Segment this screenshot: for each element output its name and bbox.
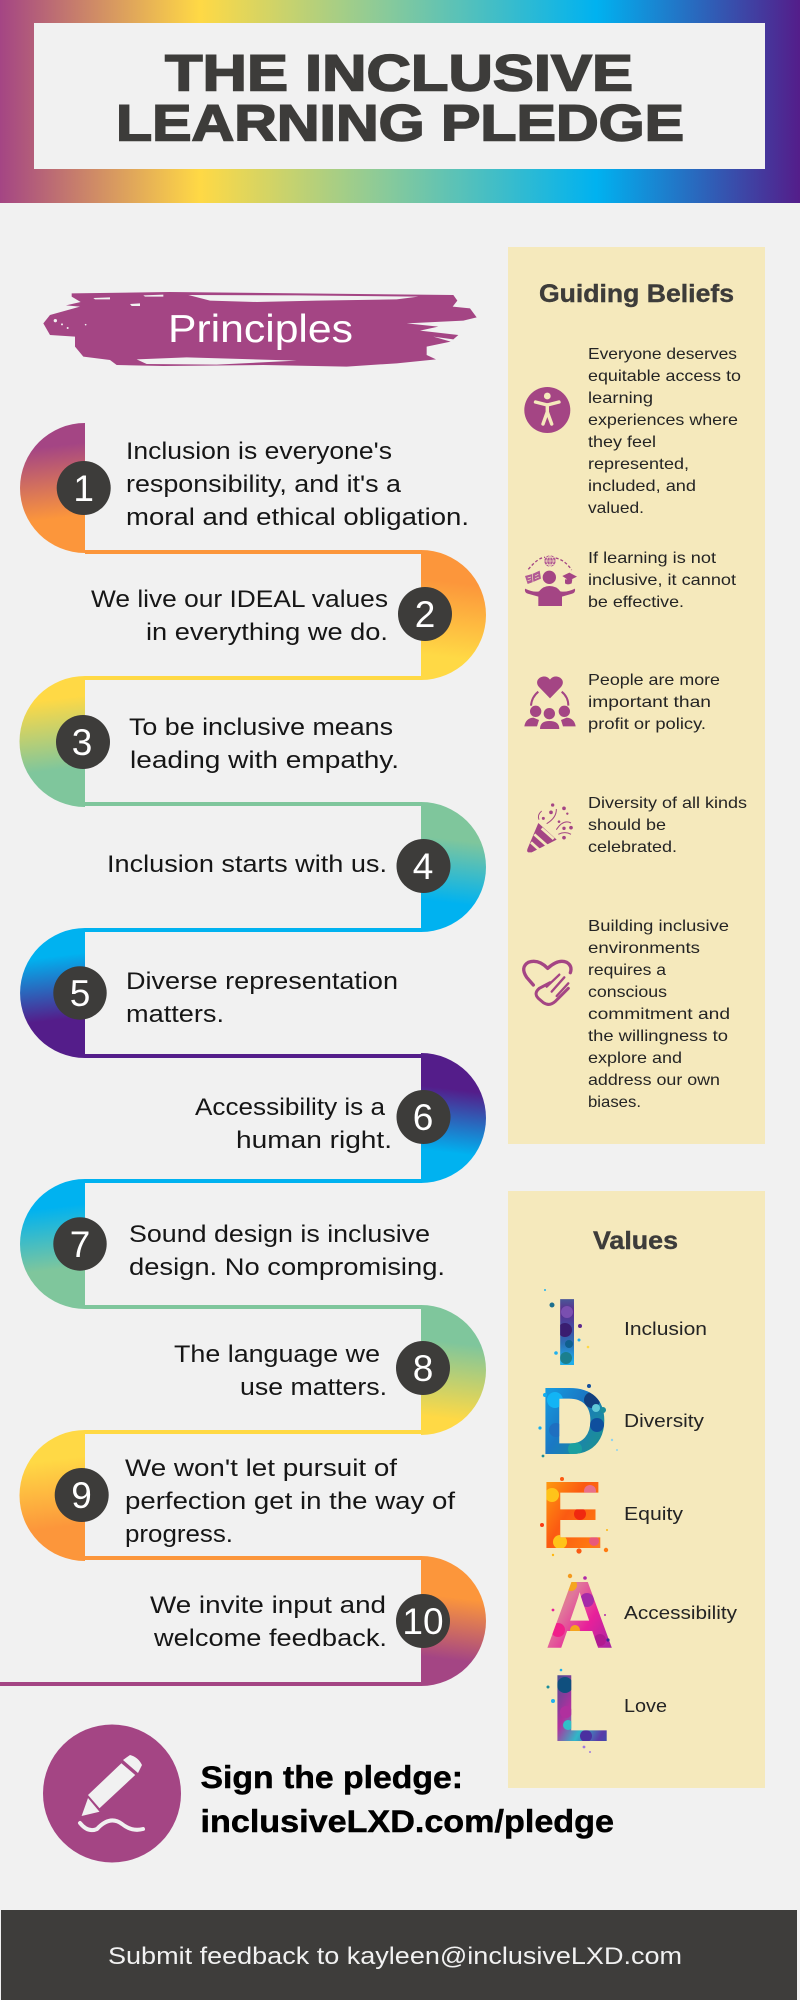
number badge (396, 839, 450, 893)
curved band (20, 928, 422, 1058)
principle 2 (85, 550, 486, 680)
icon: person juggling learning symbols (525, 555, 577, 606)
belief 1 text (588, 346, 741, 517)
letter D with paint splatter (538, 1384, 618, 1458)
number badge: 3 (72, 722, 92, 763)
statement: design. No compromising. (129, 1254, 445, 1281)
statement (129, 714, 399, 774)
statement: welcome feedback. (153, 1625, 387, 1652)
number badge: 10 (402, 1601, 444, 1642)
statement: use matters. (240, 1374, 387, 1401)
number badge (53, 966, 107, 1020)
label Equity: Equity (624, 1504, 683, 1524)
belief 5 text: explore and (588, 1050, 682, 1067)
principle 5 (20, 928, 422, 1058)
statement (126, 968, 398, 1028)
principle 8 (85, 1305, 486, 1435)
title: THE INCLUSIVE (165, 44, 633, 102)
statement: We won't let pursuit of (125, 1455, 397, 1482)
belief 5 text: the willingness to (588, 1028, 728, 1045)
number badge (396, 1594, 450, 1648)
belief 5 text: commitment and (588, 1006, 730, 1023)
title panel (34, 23, 765, 169)
statement (174, 1341, 387, 1401)
principle 1 (20, 423, 469, 554)
statement: The language we (174, 1341, 380, 1368)
panel: values (508, 1191, 765, 1788)
belief 2 text: be effective. (588, 594, 684, 611)
call to action text: Sign the pledge: (200, 1759, 463, 1795)
principle 7 (20, 1179, 445, 1309)
statement (125, 1455, 455, 1548)
panel: guiding beliefs (508, 247, 765, 1144)
number badge (396, 1090, 450, 1144)
title: LEARNING PLEDGE (116, 94, 684, 152)
panel background (508, 1191, 765, 1788)
statement (91, 586, 388, 646)
principle 3 (20, 676, 422, 807)
belief 1 text: experiences where (588, 412, 738, 429)
belief 1 text: represented, (588, 456, 689, 473)
statement: moral and ethical obligation. (126, 504, 469, 531)
belief 3 text: profit or policy. (588, 716, 706, 733)
statement: responsibility, and it's a (126, 471, 402, 498)
belief 4 text (588, 795, 747, 856)
icon: hand on heart (524, 961, 571, 1004)
number badge: 1 (73, 468, 94, 509)
heading: Principles on brush stroke (43, 292, 477, 367)
footer bar (1, 1910, 797, 2000)
number badge (57, 461, 111, 515)
principle 4 (85, 802, 486, 932)
belief 1 text: valued. (588, 500, 644, 517)
belief 1 text: learning (588, 390, 653, 407)
belief 2 text (588, 550, 737, 611)
principle 10 (0, 1556, 486, 1686)
number badge (56, 715, 110, 769)
letter A with paint splatter (547, 1574, 612, 1648)
belief 1 text: they feel (588, 434, 656, 451)
panel heading: Values (593, 1227, 678, 1255)
header banner (0, 0, 800, 203)
belief 5 text: address our own (588, 1072, 720, 1089)
number badge: 4 (413, 846, 433, 887)
statement: in everything we do. (146, 619, 388, 646)
label Love: Love (624, 1696, 667, 1716)
number badge: 8 (413, 1348, 433, 1389)
belief 5 text: conscious (588, 984, 667, 1001)
belief 3 text: People are more (588, 672, 720, 689)
curved band (0, 1556, 486, 1686)
number badge: 9 (71, 1475, 92, 1516)
statement: Sound design is inclusive (129, 1221, 430, 1248)
curved band (85, 550, 486, 680)
statement (150, 1592, 387, 1652)
call to action text (200, 1759, 614, 1839)
number badge (53, 1217, 107, 1271)
statement: Inclusion is everyone's (126, 438, 392, 465)
rainbow gradient band (0, 0, 800, 203)
belief 5 text: biases. (588, 1094, 641, 1111)
number badge: 2 (415, 594, 435, 635)
belief 5 text: requires a (588, 962, 666, 979)
icon: pencil signing (43, 1724, 181, 1862)
panel background (508, 247, 765, 1144)
statement: Diverse representation (126, 968, 398, 995)
label Inclusion: Inclusion (624, 1319, 707, 1339)
heading text: Principles (168, 308, 353, 351)
statement: progress. (125, 1521, 233, 1548)
belief 3 text (588, 672, 720, 733)
belief 4 text: Diversity of all kinds (588, 795, 747, 812)
curved band (20, 1430, 422, 1561)
number badge: 5 (70, 973, 90, 1014)
principle 6 (85, 1053, 486, 1183)
belief 1 text: Everyone deserves (588, 346, 737, 363)
curved band (85, 1053, 486, 1183)
belief 3 text: important than (588, 694, 711, 711)
belief 5 text: Building inclusive (588, 918, 729, 935)
belief 4 text: celebrated. (588, 839, 677, 856)
statement: perfection get in the way of (125, 1488, 455, 1515)
number badge (55, 1468, 109, 1522)
footer text: Submit feedback to kayleen@inclusiveLXD.com (108, 1943, 682, 1970)
letter A with paint splatter: A (545, 1562, 614, 1669)
letter D with paint splatter: D (539, 1368, 608, 1475)
statement (195, 1094, 392, 1154)
icon: people with heart (524, 677, 576, 729)
icon: party popper (527, 803, 573, 852)
curved band (20, 423, 422, 554)
statement: Inclusion starts with us. (107, 851, 387, 878)
belief 2 text: inclusive, it cannot (588, 572, 737, 589)
number badge: 6 (413, 1097, 433, 1138)
panel heading: Guiding Beliefs (539, 280, 734, 308)
statement (126, 438, 469, 531)
belief 1 text: equitable access to (588, 368, 741, 385)
statement: leading with empathy. (130, 747, 399, 774)
letter L with paint splatter: L (551, 1655, 610, 1762)
belief 4 text: should be (588, 817, 666, 834)
statement: To be inclusive means (129, 714, 393, 741)
curved band (85, 802, 486, 932)
label Diversity: Diversity (624, 1411, 704, 1431)
belief 1 text: included, and (588, 478, 696, 495)
curved band (20, 676, 422, 807)
icon: accessibility person (524, 387, 570, 433)
brush stroke (43, 292, 477, 367)
letter E with paint splatter: E (540, 1462, 604, 1569)
number badge (398, 587, 452, 641)
letter I with paint splatter: I (554, 1279, 580, 1386)
number badge: 7 (70, 1224, 90, 1265)
belief 2 text: If learning is not (588, 550, 717, 567)
statement (129, 1221, 445, 1281)
belief 5 text: environments (588, 940, 700, 957)
letter I with paint splatter (544, 1289, 590, 1365)
call to action text: inclusiveLXD.com/pledge (200, 1803, 614, 1839)
label Accessibility: Accessibility (624, 1603, 737, 1623)
sign the pledge call to action (43, 1724, 614, 1862)
statement: matters. (126, 1001, 224, 1028)
statement: human right. (236, 1127, 392, 1154)
statement: We live our IDEAL values (91, 586, 388, 613)
number badge (396, 1341, 450, 1395)
belief 5 text (588, 918, 730, 1111)
curved band (85, 1305, 486, 1435)
title (116, 44, 684, 152)
statement: Accessibility is a (195, 1094, 386, 1121)
statement: We invite input and (150, 1592, 386, 1619)
principle 9 (20, 1430, 455, 1561)
curved band (20, 1179, 422, 1309)
